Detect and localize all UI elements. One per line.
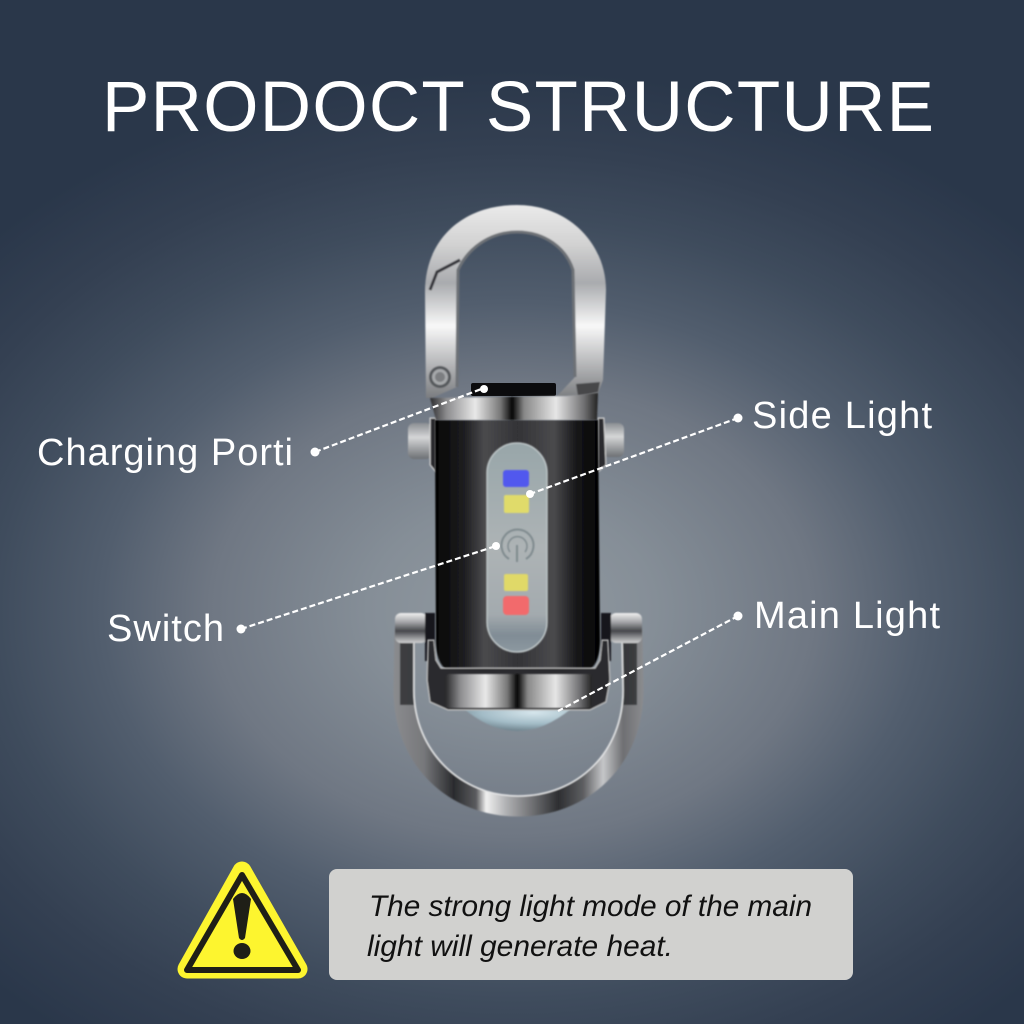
yellow LED top xyxy=(504,495,529,513)
main lens xyxy=(463,708,572,731)
note panel xyxy=(329,869,853,980)
icon: warning triangle xyxy=(187,871,298,970)
charging port xyxy=(471,383,556,396)
carabiner hook xyxy=(425,205,606,398)
flashlight body xyxy=(435,420,600,672)
bottom collar xyxy=(446,674,592,708)
note text: light will generate heat. xyxy=(367,930,673,963)
callout: side light: Side Light xyxy=(752,395,932,437)
side pins xyxy=(408,418,624,472)
bottom bracket xyxy=(427,640,610,710)
callout: switch xyxy=(107,542,500,650)
top collar xyxy=(430,393,598,420)
yellow LED bottom xyxy=(504,574,528,591)
note text: The strong light mode of the main xyxy=(369,890,812,923)
callout: charging port xyxy=(37,385,488,474)
product: keychain flashlight xyxy=(395,205,642,806)
title: PRODOCT STRUCTURE xyxy=(102,68,934,147)
blue LED xyxy=(503,470,529,487)
callout: charging port: Charging Porti xyxy=(37,432,293,474)
callout: main light xyxy=(558,595,940,711)
D-ring xyxy=(395,613,642,806)
red LED xyxy=(503,596,529,615)
light window xyxy=(487,443,547,652)
power switch icon xyxy=(501,529,534,562)
callout: switch: Switch xyxy=(107,608,224,650)
callout: side light xyxy=(526,395,932,498)
callout: main light: Main Light xyxy=(754,595,940,637)
